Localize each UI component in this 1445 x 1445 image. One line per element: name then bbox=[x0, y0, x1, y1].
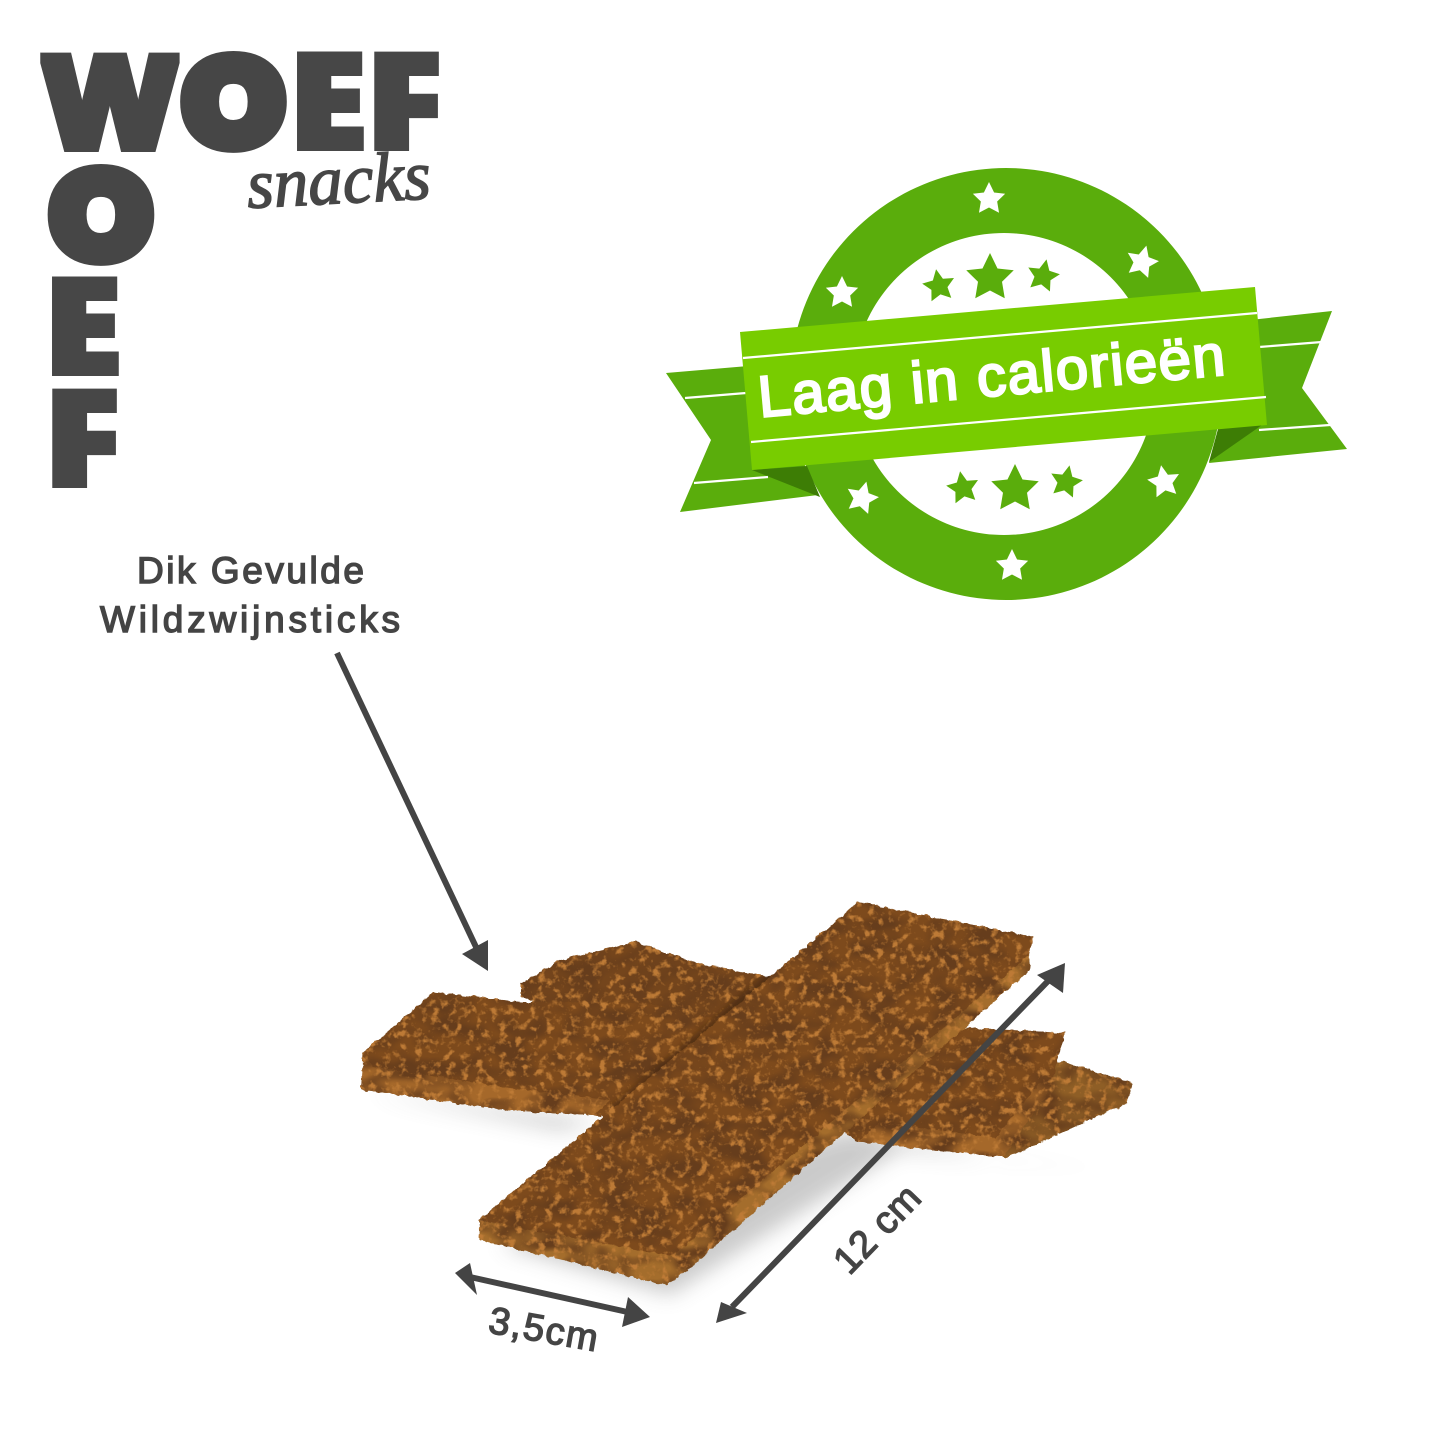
left ribbon fold bbox=[752, 466, 820, 497]
left ribbon tail bbox=[666, 365, 818, 512]
stick: lower right bbox=[960, 1060, 1133, 1158]
product photo: meat sticks bbox=[361, 896, 1133, 1295]
label: Dik Gevulde Wildzwijnsticks bbox=[100, 550, 400, 640]
banner centre bbox=[740, 287, 1267, 470]
logo vertical letter E: E bbox=[58, 253, 110, 399]
label: 3,5cm: 3,5cm bbox=[486, 1300, 601, 1360]
contact shadow under front stick bbox=[610, 976, 952, 1108]
banner lines bbox=[743, 313, 1266, 442]
right ribbon fold bbox=[1209, 425, 1262, 462]
stick: right bottom edge bbox=[858, 1082, 1052, 1157]
stick: back top bbox=[521, 942, 810, 1070]
logo letter E: E bbox=[303, 28, 355, 174]
badge: Laag in calorieen bbox=[666, 168, 1347, 600]
ribbon tail lines bbox=[685, 342, 1330, 483]
label: Dik Gevulde Wildzwijnsticks: Dik Gevulde bbox=[137, 550, 364, 591]
stick: front top face bbox=[479, 902, 1034, 1256]
logo vertical letter F: F bbox=[58, 367, 108, 512]
logo script word snacks: snacks bbox=[245, 137, 433, 224]
logo letter O: O bbox=[186, 38, 281, 167]
soft shadows bbox=[370, 1092, 1120, 1295]
logo letter W: W bbox=[46, 30, 175, 175]
green stars top and bottom bbox=[920, 253, 1085, 509]
label: 12 cm: 12 cm bbox=[826, 1177, 930, 1282]
stick: left bottom edge bbox=[361, 1056, 610, 1115]
right ribbon tail bbox=[1209, 311, 1347, 463]
stick: left bbox=[361, 992, 770, 1130]
logo: Woef Woef snacks bbox=[46, 28, 433, 512]
arrow: label to stick bbox=[337, 653, 488, 971]
stick: front side edge bbox=[479, 953, 1030, 1285]
arrow: 3,5cm width bbox=[455, 1263, 650, 1327]
white stars on ring bbox=[826, 182, 1182, 580]
logo vertical letter O: O bbox=[53, 151, 149, 280]
arrow: 12 cm length bbox=[716, 963, 1065, 1323]
stick: right bbox=[835, 1025, 1065, 1157]
label: Dik Gevulde Wildzwijnsticks: Wildzwijnsticks bbox=[100, 599, 400, 640]
logo letter F: F bbox=[380, 30, 430, 175]
banner text: Laag in calorieën bbox=[755, 323, 1227, 430]
badge ring bbox=[790, 168, 1222, 600]
